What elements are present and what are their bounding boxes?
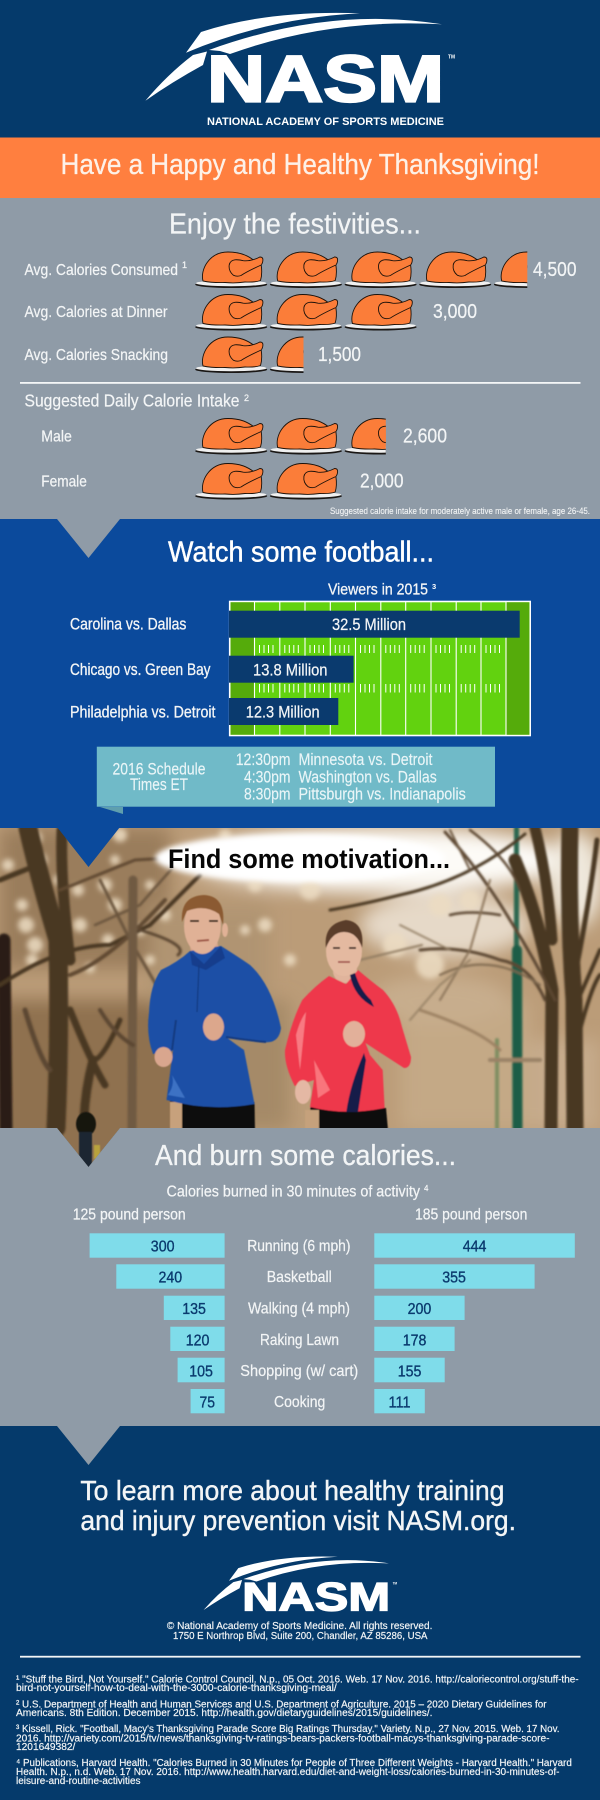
row: Carolina vs. Dallas — [70, 616, 406, 634]
bars: cooking: Cooking — [274, 1394, 325, 1411]
arrow: football notch — [57, 827, 120, 867]
row: female — [41, 464, 404, 500]
chart label: viewers in 2015: 3 — [432, 582, 436, 591]
copyright: © National Academy of Sports Medicine. All rights reserved. — [167, 1621, 432, 1632]
NASM logo: NATIONAL ACADEMY OF SPORTS MEDICINE — [207, 116, 444, 128]
bars: walking — [164, 1296, 465, 1320]
row: Philadelphia vs. Detroit: 12.3 Million — [246, 704, 320, 722]
panel: burn some calories — [0, 1128, 600, 1426]
references — [16, 1674, 579, 1787]
panel: watch some football — [0, 519, 600, 828]
bars: walking: Walking (4 mph) — [248, 1300, 350, 1318]
bars: raking lawn: 178 — [403, 1332, 426, 1349]
row: calories consumed: Avg. Calories Consumed — [24, 262, 178, 279]
label: 125 pound person: 125 pound person — [73, 1206, 186, 1223]
photo tree trunks and branches — [0, 828, 600, 1128]
subheading: suggested daily intake: Suggested Daily Calorie Intake — [24, 391, 240, 411]
callout: 2016 schedule: 12:30pm — [236, 751, 290, 769]
chart: football field bars — [229, 602, 530, 736]
callout: 2016 schedule: 4:30pm — [244, 768, 290, 786]
text glow for motivation heading — [155, 834, 445, 882]
reference 4 — [16, 1758, 572, 1787]
man jogging — [148, 895, 281, 1130]
row: Chicago vs. Green Bay: 13.8 Million — [253, 661, 328, 679]
bars: basketball: 240 — [158, 1270, 182, 1287]
reference 4: Health. N.p., n.d. Web. 17 Nov. 2016. http://www.health.harvard.edu/diet-and-weight-loss/calories-burned-in-30-minutes-of- — [16, 1767, 560, 1778]
row: calories snacking: 1,500 — [318, 344, 361, 366]
bars: running: Running (6 mph) — [247, 1238, 350, 1255]
panel: enjoy the festivities — [0, 198, 600, 519]
bars: raking lawn: Raking Lawn — [260, 1332, 339, 1349]
bars: raking lawn: 120 — [186, 1332, 209, 1349]
header band with NASM logo — [0, 0, 600, 138]
reference 2: Americans. 8th Edition. December 2015. http://health.gov/dietaryguidelines/2015/guidelines/. — [16, 1708, 432, 1719]
reference 3: ³ Kissell, Rick. "Football, Macy's Thanksgiving Parade Score Big Ratings Thursday." Variety. N.p., 27 Nov. 2015. Web. 17 Nov. — [16, 1724, 560, 1735]
row: calories at dinner: 3,000 — [433, 301, 477, 323]
NASM logo small: TM — [393, 1581, 397, 1585]
NASM logo — [145, 13, 455, 128]
bars: raking lawn — [170, 1327, 455, 1351]
panel: photo with joggers — [0, 828, 600, 1170]
row: calories at dinner — [24, 294, 477, 330]
photo background — [0, 828, 600, 1170]
reference 3: 1201649382/ — [16, 1742, 76, 1753]
arrow: calories notch — [57, 1426, 120, 1465]
photo bokeh — [2, 828, 480, 979]
reference 2 — [16, 1699, 547, 1719]
distant runner silhouette — [76, 1112, 100, 1168]
reference 1: ¹ "Stuff the Bird, Not Yourself." Calorie Control Council. N.p., 05 Oct. 2016. Web. 17 Nov. 2016. http://caloriecontrol.org/stuff-the- — [16, 1674, 579, 1685]
bars: running: 300 — [151, 1239, 175, 1256]
bars: basketball: Basketball — [267, 1269, 332, 1286]
heading: festivities: Enjoy the festivities... — [169, 208, 421, 240]
chart label: viewers in 2015: Viewers in 2015 — [328, 581, 428, 598]
callout: 2016 schedule — [97, 747, 495, 814]
reference 2: ² U.S. Department of Health and Human Services and U.S. Department of Agriculture. 2015 – 2020 Dietary Guidelines for — [16, 1699, 547, 1710]
bars: running — [90, 1233, 575, 1258]
copyright — [167, 1621, 432, 1642]
call to action — [80, 1475, 516, 1536]
call to action: To learn more about healthy training — [80, 1475, 504, 1506]
heading: burn calories: And burn some calories... — [155, 1140, 456, 1172]
row: male — [41, 418, 447, 454]
row: female: Female — [41, 474, 87, 491]
row: calories snacking: Avg. Calories Snacking — [24, 347, 168, 364]
callout: 2016 schedule: Washington vs. Dallas — [298, 768, 437, 786]
bars: walking: 135 — [182, 1301, 206, 1318]
row: Carolina vs. Dallas: 32.5 Million — [332, 616, 406, 634]
NASM logo small — [204, 1556, 397, 1619]
bars: cooking: 75 — [200, 1394, 215, 1411]
subheading: suggested daily intake: 2 — [244, 393, 249, 403]
reference 1 — [16, 1674, 579, 1694]
reference 1: bird-not-yourself-how-to-deal-with-the-3000-calorie-thanksgiving-meal/ — [16, 1683, 337, 1694]
callout: 2016 schedule: 8:30pm — [244, 786, 290, 804]
NASM logo: TM — [448, 54, 455, 60]
copyright: 1750 E Northrop Blvd, Suite 200, Chandler, AZ 85286, USA — [173, 1631, 428, 1642]
row: Carolina vs. Dallas: Carolina vs. Dallas — [70, 616, 186, 634]
bars: cooking: 111 — [388, 1394, 411, 1411]
row: Philadelphia vs. Detroit: Philadelphia vs. Detroit — [70, 703, 216, 721]
heading: find some motivation: Find some motivation... — [168, 844, 450, 874]
label: 185 pound person: 185 pound person — [415, 1206, 527, 1223]
bars: shopping: 155 — [398, 1363, 421, 1380]
NASM logo small: NASM — [242, 1574, 390, 1619]
row: calories at dinner: Avg. Calories at Dinner — [24, 304, 168, 321]
chart subtitle: Calories burned in 30 minutes of activity — [166, 1184, 420, 1201]
bars: basketball — [116, 1264, 535, 1289]
bars: shopping: Shopping (w/ cart) — [240, 1363, 358, 1380]
row: calories consumed — [24, 252, 576, 288]
row: Philadelphia vs. Detroit — [70, 703, 320, 722]
title banner — [0, 138, 600, 198]
callout: 2016 schedule: 2016 Schedule — [112, 760, 206, 778]
woman jogging — [285, 920, 411, 1130]
row: female: 2,000 — [360, 471, 404, 493]
bars: shopping — [178, 1358, 445, 1382]
row: Chicago vs. Green Bay — [70, 661, 328, 679]
callout: 2016 schedule: Pittsburgh vs. Indianapolis — [298, 786, 466, 804]
bars: running: 444 — [463, 1239, 486, 1256]
callout: 2016 schedule: Times ET — [130, 776, 188, 794]
row: calories consumed: 4,500 — [533, 259, 576, 281]
panel: footer — [0, 1426, 600, 1800]
reference 4: ⁴ Publications, Harvard Health. "Calories Burned in 30 Minutes for People of Three Different Weights - Harvard Health." Harvard — [16, 1758, 572, 1769]
row: Chicago vs. Green Bay: Chicago vs. Green Bay — [70, 661, 211, 679]
reference 3: 2016. http://variety.com/2015/tv/news/thanksgiving-tv-ratings-bears-packers-football-macys-thanksgiving-parade-score- — [16, 1733, 550, 1744]
title banner: Have a Happy and Healthy Thanksgiving! — [60, 149, 540, 181]
row: male: Male — [41, 429, 72, 446]
arrow: festivities notch — [57, 519, 120, 558]
callout: 2016 schedule: Minnesota vs. Detroit — [298, 751, 433, 769]
chart subtitle: 4 — [424, 1184, 429, 1193]
bars: cooking — [191, 1389, 425, 1413]
NASM logo: NASM — [207, 42, 444, 116]
bars: basketball: 355 — [442, 1270, 466, 1287]
row: calories consumed: 1 — [182, 260, 187, 270]
heading: football: Watch some football... — [168, 537, 434, 569]
bars: walking: 200 — [408, 1301, 431, 1318]
row: male: 2,600 — [403, 426, 447, 448]
row: calories snacking — [24, 337, 361, 373]
call to action: and injury prevention visit NASM.org. — [80, 1505, 516, 1536]
bars: shopping: 105 — [189, 1363, 213, 1380]
reference 3 — [16, 1724, 560, 1753]
reference 4: leisure-and-routine-activities — [16, 1776, 140, 1787]
